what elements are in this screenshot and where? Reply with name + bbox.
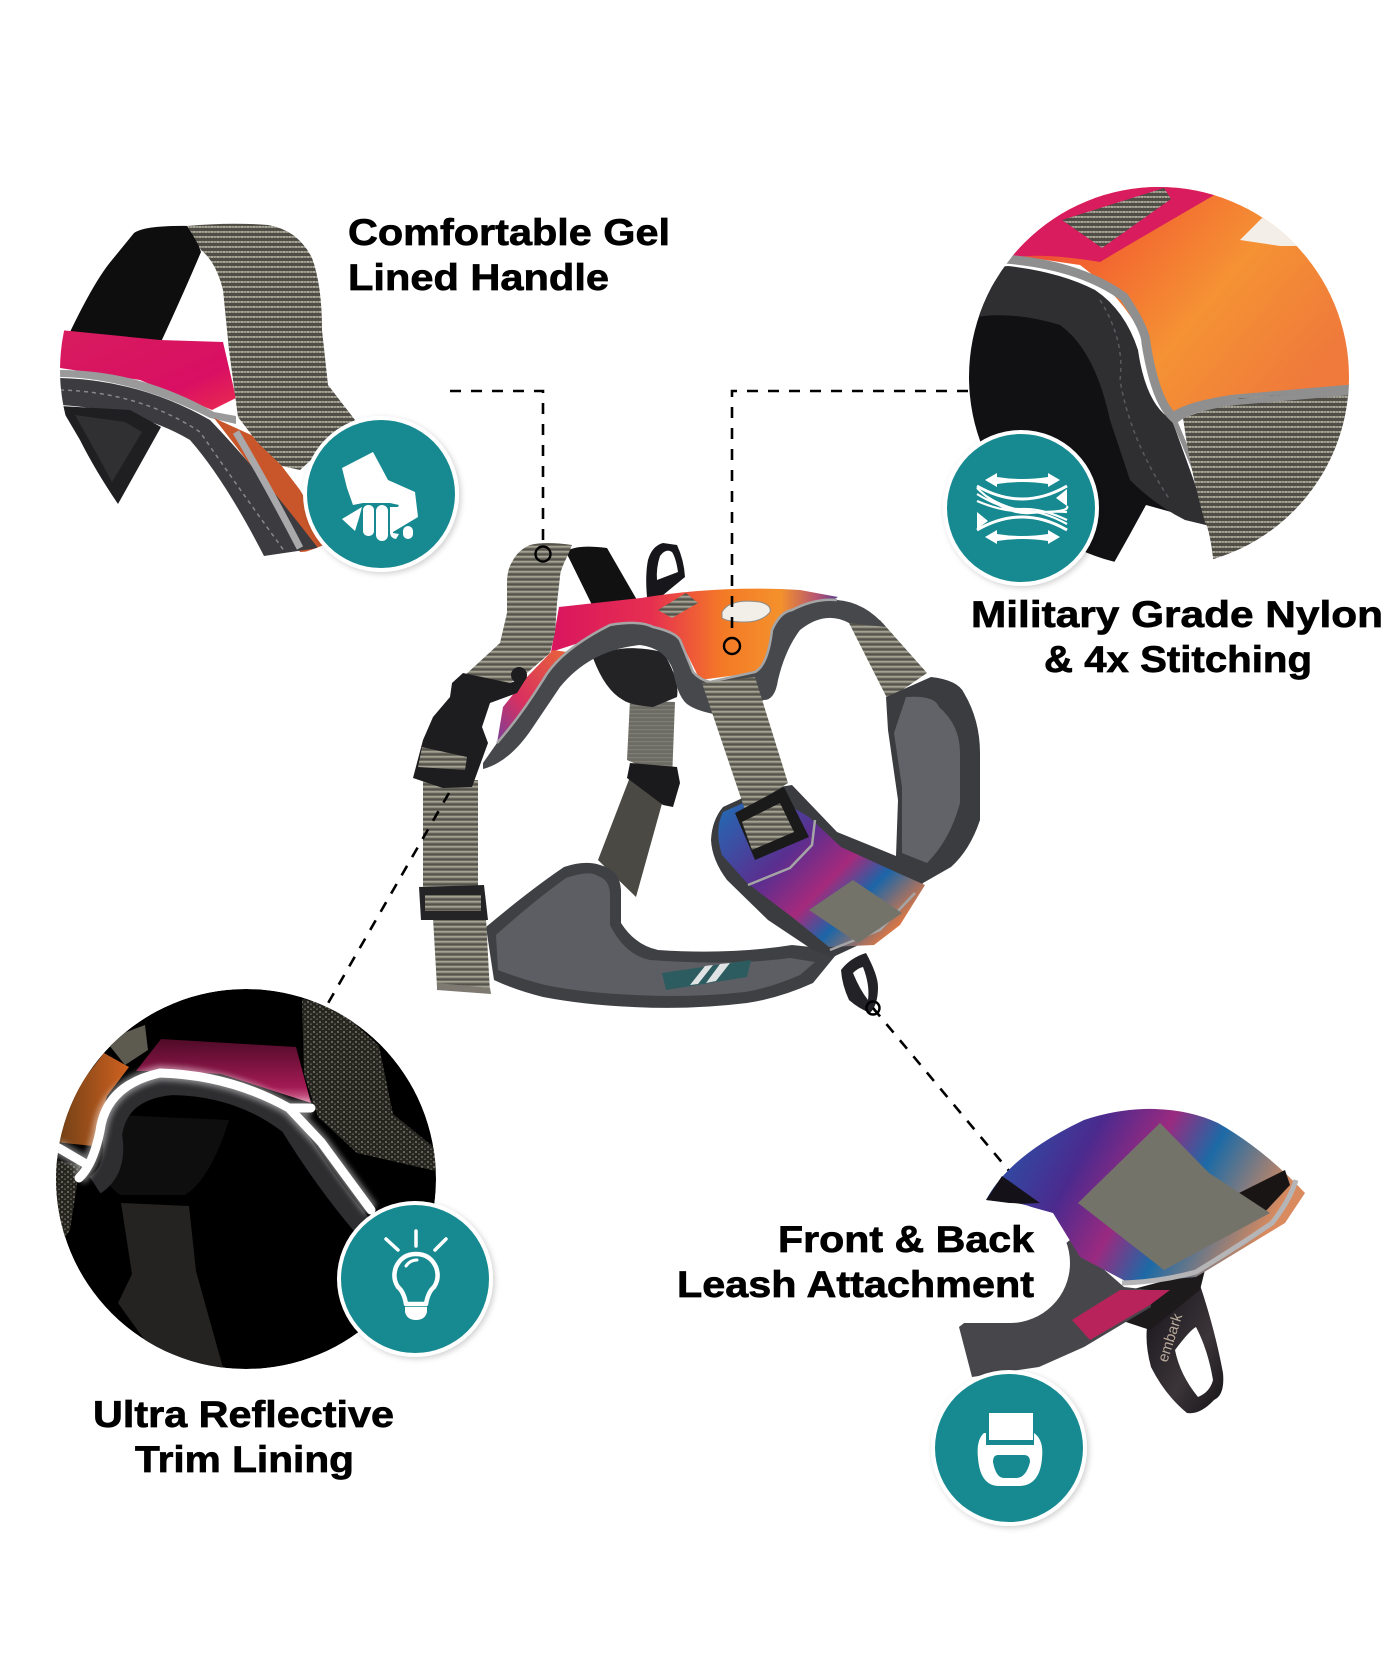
- detail image: military grade nylon: [969, 187, 1349, 562]
- heading: Ultra Reflective Trim Lining: [93, 1394, 394, 1480]
- small top strap: [658, 593, 698, 618]
- dashed connector: nylon: [732, 391, 968, 638]
- chest pad: [486, 863, 840, 1008]
- logo patch: [722, 601, 770, 622]
- white cut-out behind label: [660, 1203, 1070, 1323]
- detail image: leash attachment: [660, 1109, 1305, 1413]
- patterned fabric: [986, 1109, 1305, 1283]
- icon badge: strap loop: [931, 1370, 1087, 1526]
- heading: Front & Back Leash Attachment: Leash Attachment: [677, 1264, 1034, 1305]
- middle strap: [627, 700, 675, 780]
- connector ring: leash: [866, 1002, 880, 1014]
- heading: Ultra Reflective Trim Lining: Trim Lining: [135, 1439, 354, 1480]
- icon badge: stretch fabric: [943, 430, 1099, 586]
- top D ring: [646, 543, 685, 610]
- detail image: gel lined handle: [60, 224, 355, 556]
- nylon webbing strap: [1078, 1123, 1270, 1270]
- icon: D ring with strap: [978, 1413, 1042, 1486]
- icon badge: light bulb: [337, 1201, 493, 1357]
- leash hook: embark: [1155, 1311, 1186, 1364]
- detail image: reflective trim at night: [50, 989, 436, 1375]
- lower left slider: [419, 885, 488, 920]
- arch band with trim: [483, 600, 886, 769]
- left vertical strap: [423, 780, 478, 890]
- heading: Military Grade Nylon & 4x Stitching: & 4x Stitching: [1044, 639, 1312, 680]
- front strap slider: [735, 787, 809, 860]
- back handle underside: [566, 547, 637, 607]
- underside dome: [593, 648, 677, 707]
- front panel fabric: [718, 800, 925, 947]
- side release buckle: [413, 667, 527, 788]
- heading: Front & Back Leash Attachment: [677, 1219, 1034, 1305]
- connector ring: nylon: [724, 638, 740, 654]
- heading: Comfortable Gel Lined Handle: Comfortable Gel: [348, 212, 670, 253]
- right shoulder strap: [849, 620, 927, 700]
- lower front strap: [809, 880, 902, 943]
- heading: Comfortable Gel Lined Handle: [348, 212, 670, 298]
- chest pad label: [662, 960, 751, 990]
- icon: stretching fibres: [977, 473, 1067, 544]
- right pad lining: [894, 697, 960, 863]
- heading: Military Grade Nylon & 4x Stitching: [971, 594, 1383, 680]
- central harness product: [413, 543, 980, 1013]
- lower dark strap: [598, 777, 663, 897]
- heading: Military Grade Nylon & 4x Stitching: Military Grade Nylon: [971, 594, 1383, 635]
- connector ring: handle: [536, 546, 550, 562]
- reflective trim: [1122, 1180, 1296, 1283]
- dashed connector: leash attachment: [873, 1008, 1010, 1172]
- icon badge: gripping hand: [303, 416, 459, 572]
- left side fabric: [497, 650, 567, 743]
- leash hook: [1146, 1285, 1223, 1413]
- back panel fabric: [551, 589, 838, 680]
- dashed connector: reflective trim: [327, 793, 449, 1005]
- dark strap: [959, 1240, 1151, 1377]
- heading: Comfortable Gel Lined Handle: Lined Handle: [348, 257, 609, 298]
- shadow under strap: [1120, 1270, 1205, 1330]
- middle strap buckle: [627, 763, 680, 807]
- heading: Front & Back Leash Attachment: Front & Back: [778, 1219, 1034, 1260]
- centre strap: [702, 677, 788, 810]
- dashed connector: handle: [450, 391, 543, 548]
- icon: fist: [342, 452, 418, 541]
- lower D ring: [841, 953, 878, 1013]
- right pad: [711, 677, 980, 957]
- handle strap: [463, 543, 572, 683]
- heading: Ultra Reflective Trim Lining: Ultra Reflective: [93, 1394, 394, 1435]
- icon: bulb with rays: [386, 1231, 446, 1320]
